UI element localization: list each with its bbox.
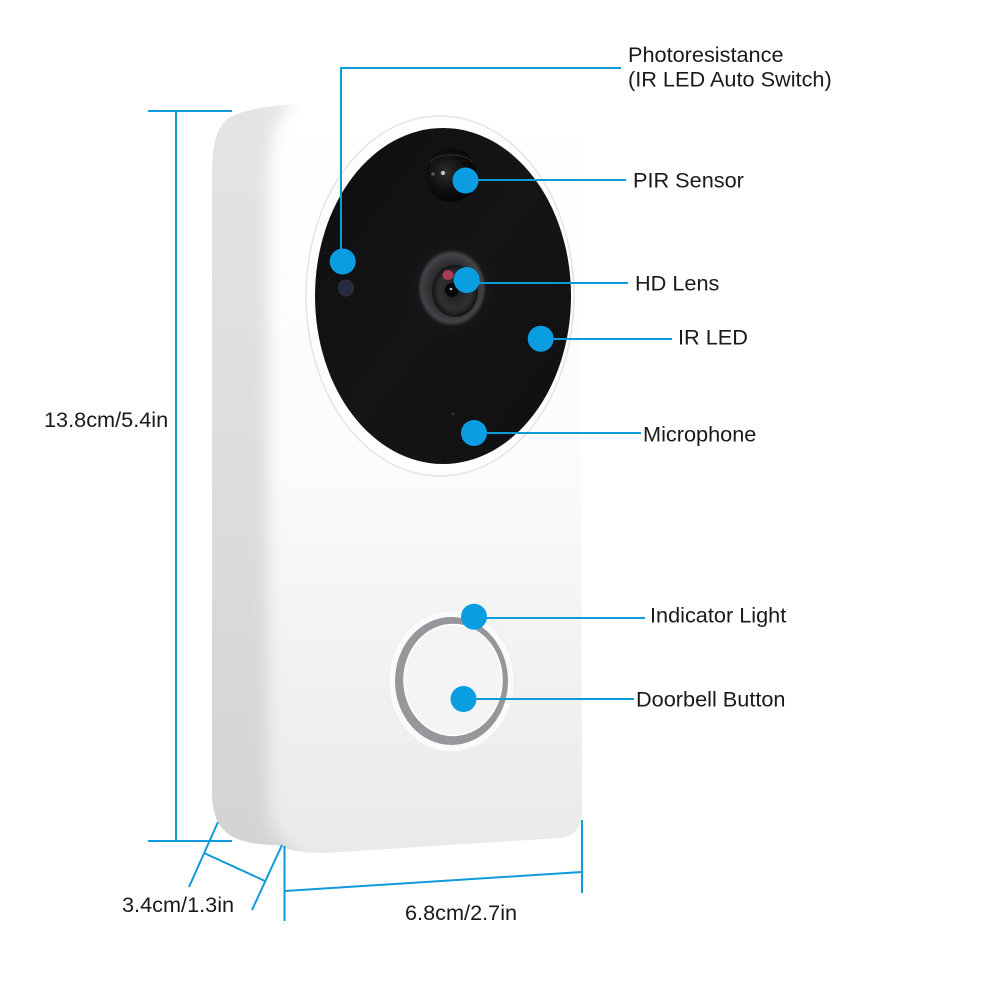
width label: 6.8cm/2.7in (405, 900, 517, 925)
callout: doorbell button (450, 686, 786, 712)
device side shading (212, 104, 296, 850)
callout: microphone (461, 420, 756, 446)
callout: PIR sensor: PIR Sensor (633, 168, 744, 192)
device body (212, 103, 582, 853)
depth dimension (122, 822, 282, 917)
PIR sensor (426, 148, 476, 202)
height label: 13.8cm/5.4in (44, 407, 168, 432)
button indicator ring (395, 617, 508, 745)
callout: PIR sensor (452, 168, 744, 194)
callout: photoresistance: Photoresistance (628, 42, 784, 67)
HD lens (408, 240, 496, 336)
button outer recess (388, 610, 514, 752)
width dimension (284, 820, 582, 925)
depth label: 3.4cm/1.3in (122, 892, 234, 917)
microphone hole (452, 412, 454, 416)
callout: indicator light: Indicator Light (650, 602, 786, 628)
photoresistance window (338, 280, 354, 296)
callout: IR LED (528, 324, 748, 352)
camera black panel (315, 128, 571, 464)
button cap (404, 624, 502, 736)
callout: IR LED: IR LED (678, 324, 748, 350)
callout: photoresistance (330, 42, 832, 274)
callout: doorbell button: Doorbell Button (636, 686, 786, 712)
callout: HD lens (454, 267, 720, 296)
camera bezel (306, 116, 574, 476)
callout: indicator light (461, 602, 786, 630)
doorbell device (190, 95, 582, 865)
height dimension (44, 111, 232, 841)
callout: photoresistance: (IR LED Auto Switch) (628, 66, 832, 92)
callout: HD lens: HD Lens (635, 270, 720, 296)
callout: microphone: Microphone (643, 422, 756, 446)
